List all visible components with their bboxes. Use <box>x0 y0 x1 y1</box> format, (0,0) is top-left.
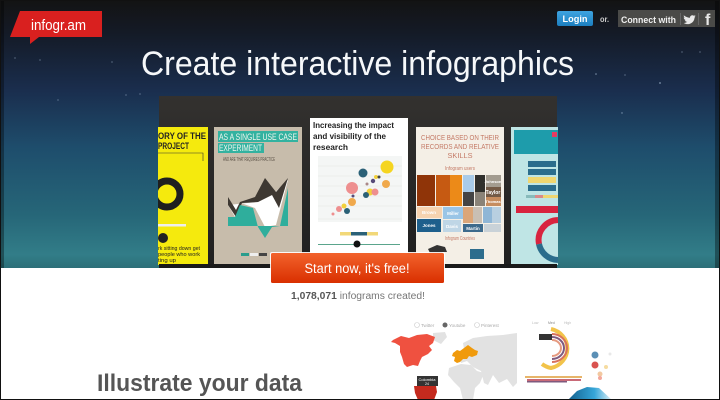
area chart <box>228 178 288 238</box>
or label: or. <box>600 15 609 24</box>
logo: infogr.am speech flag <box>10 11 102 44</box>
map: south america <box>414 386 437 400</box>
card: single use case experiment: AS A SINGLE USE CASE <box>219 132 297 142</box>
map: north america <box>391 334 435 367</box>
card: story of the project <box>154 127 208 265</box>
card: single use case experiment: AND ARE THAT REQUIRES PRACTICE <box>223 157 275 163</box>
grey landmass <box>433 332 517 400</box>
treemap: Miller <box>447 211 459 216</box>
connect with social bar <box>618 10 715 29</box>
tooltip: colombia: Colombia <box>419 377 436 382</box>
card: choice based on records <box>416 127 504 265</box>
page content background <box>0 268 720 400</box>
card: choice based on records: Infogram Countries <box>445 236 475 242</box>
icon: twitter bird <box>684 15 696 24</box>
bubble chart <box>318 156 402 222</box>
card: increasing impact and visibility: research <box>313 142 348 152</box>
hero background <box>0 0 720 268</box>
radial bar chart: Med <box>548 321 555 325</box>
world map chart: Pinterest <box>481 323 500 328</box>
card: teal people and donut <box>511 127 558 265</box>
card: choice based on records: Infogram users <box>445 166 475 172</box>
treemap: Brown <box>422 210 436 215</box>
card: choice based on records: RECORDS AND RELATIVE <box>421 142 499 151</box>
connect with social bar: Connect with <box>621 15 676 26</box>
tooltip: colombia <box>417 376 438 386</box>
showcase panel <box>154 96 558 268</box>
world map chart <box>391 322 517 400</box>
radial bar chart <box>525 321 582 382</box>
map: europe <box>452 345 478 363</box>
card: story of the project: ORY OF THE <box>158 131 206 141</box>
start now button: Start now, it's free! <box>304 261 410 276</box>
card: story of the project: PROJECT <box>158 141 189 151</box>
treemap: Martin <box>466 226 480 231</box>
card: increasing impact and visibility <box>310 118 408 255</box>
title: Create interactive infographics <box>141 45 574 83</box>
card: choice based on records: CHOICE BASED ON THEIR <box>421 133 499 142</box>
treemap: Davis <box>446 224 458 229</box>
treemap: Johnson <box>485 179 502 184</box>
bubble decoration <box>592 352 612 380</box>
login button: Login <box>562 14 588 25</box>
treemap: Taylor <box>486 190 500 196</box>
heading: illustrate your data: Illustrate your data <box>97 370 303 397</box>
world map chart: Youtube <box>449 323 466 328</box>
card: story of the project: ting up <box>158 258 176 264</box>
3d chart corner <box>568 387 612 400</box>
radial bar chart: High <box>564 321 571 325</box>
card: single use case experiment: EXPERIMENT <box>219 143 262 153</box>
login button <box>557 11 593 26</box>
card: increasing impact and visibility: Increasing the impact <box>313 120 394 130</box>
infograms created counter: 1,078,071 infograms created! <box>291 291 425 302</box>
tooltip: colombia: 24 <box>425 382 429 386</box>
card: increasing impact and visibility: and visibility of the <box>313 131 386 141</box>
card: story of the project: rk sitting down get <box>158 246 200 252</box>
treemap: Jones <box>422 223 436 228</box>
radial bar chart: Low <box>532 321 539 325</box>
card: story of the project: people who work <box>158 252 200 258</box>
treemap: Thomas <box>485 199 501 204</box>
world map chart: Twitter <box>421 323 435 328</box>
icon: facebook f: f <box>705 12 711 29</box>
start now button <box>270 252 445 284</box>
card: choice based on records: SKILLS <box>448 151 472 160</box>
card: single use case experiment <box>214 127 302 265</box>
treemap <box>417 175 502 232</box>
logo: infogr.am speech flag: infogr.am <box>31 17 86 34</box>
